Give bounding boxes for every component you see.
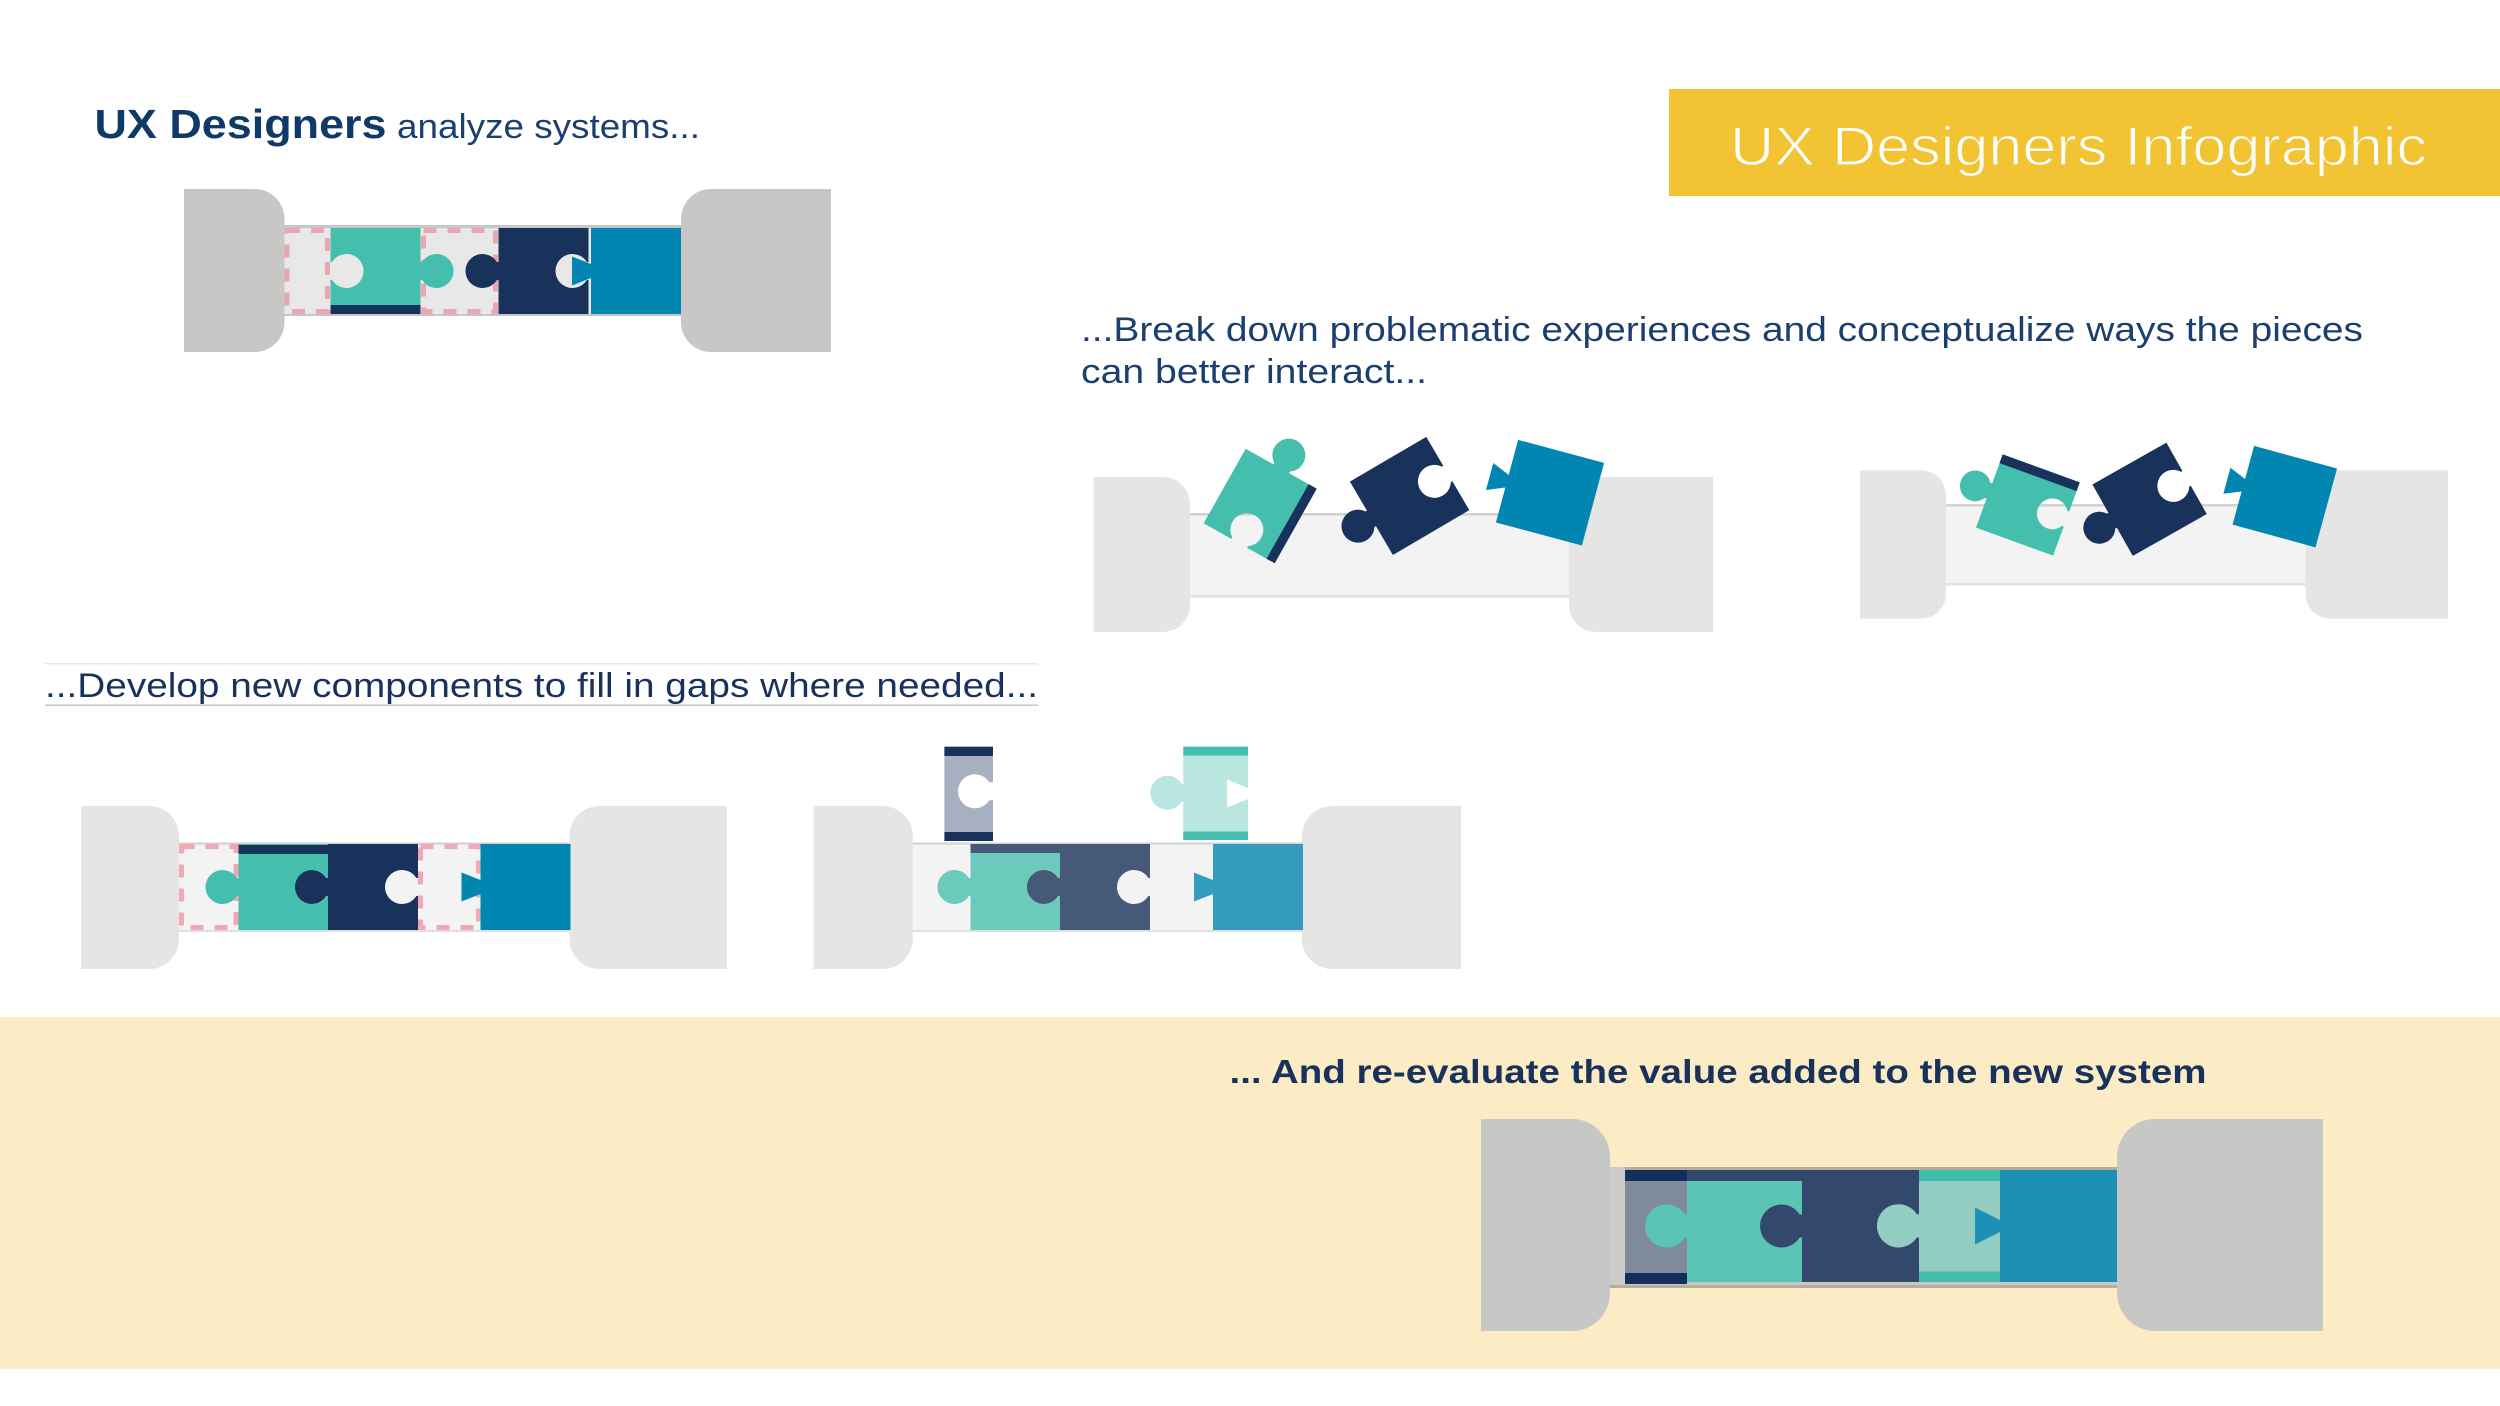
diagram: original system with gaps	[184, 189, 831, 352]
diagram: pieces pulled apart, first arrangement	[1094, 421, 1713, 632]
text: develop new components: ...Develop new components to fill in gaps where needed...	[45, 667, 1038, 705]
diagram: pieces pulled apart, second arrangement	[1860, 441, 2448, 619]
bottom band	[0, 1017, 2500, 1369]
text: break down problematic experiences: can better interact...	[1081, 353, 1427, 391]
piece: blue	[1975, 1170, 2117, 1282]
heading: UX Designers analyze systems: UX Designers	[94, 101, 386, 147]
new component: teal connector	[1150, 747, 1248, 840]
text: break down problematic experiences	[1081, 311, 2363, 391]
diagram: completed new system	[1481, 1119, 2323, 1331]
piece: navy	[1760, 1170, 1919, 1282]
text: re-evaluate the value: ... And re-evaluate the value added to the new system	[1230, 1053, 2206, 1090]
title banner	[1669, 89, 2500, 196]
piece: teal	[1645, 1170, 1802, 1282]
diagram: new components ready to drop in	[814, 747, 1461, 969]
heading: UX Designers analyze systems: analyze systems...	[397, 108, 700, 146]
diagram: gaps identified with dashed outlines	[81, 806, 727, 969]
heading: UX Designers analyze systems	[94, 101, 700, 147]
text: break down problematic experiences: ...Break down problematic experiences and conceptualize ways the pieces	[1081, 311, 2363, 349]
title banner: UX Designers Infographic	[1730, 115, 2427, 177]
new component: navy connector	[944, 747, 993, 841]
piece: light teal connector	[1877, 1170, 2000, 1282]
piece: grey-navy connector	[1625, 1170, 1687, 1284]
